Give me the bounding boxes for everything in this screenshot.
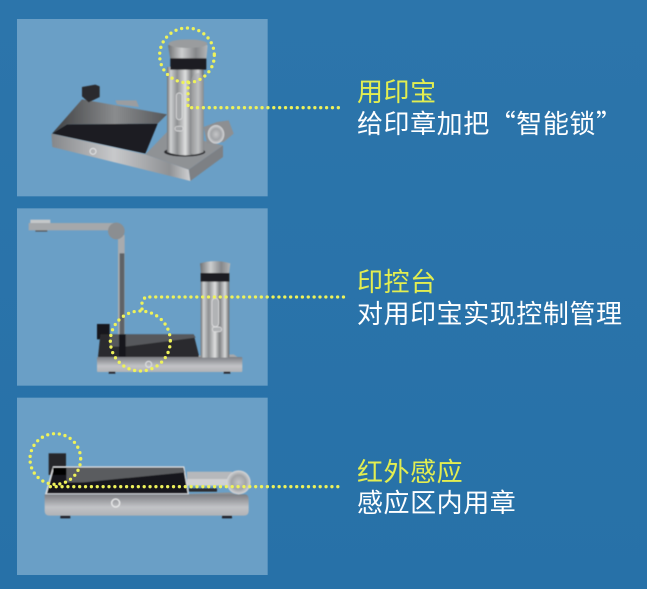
text block: infrared sensor	[357, 452, 516, 520]
text block: infrared sensor: 感应区内用章	[357, 483, 516, 520]
text block: control console: 印控台	[357, 262, 437, 299]
text block: control console: 对用印宝实现控制管理	[357, 294, 623, 331]
device: arm, console and stamp	[29, 220, 242, 374]
text block: stamp unit: 用印宝	[357, 72, 437, 109]
text block: infrared sensor: 红外感应	[357, 452, 463, 489]
panel: control console	[17, 208, 344, 386]
panel: infrared sensor	[17, 398, 344, 575]
callout ring and leader line	[30, 434, 344, 487]
device: stamp base and stamp	[51, 39, 234, 181]
text block: control console	[357, 262, 623, 331]
text block: stamp unit: 给印章加把“智能锁”	[357, 104, 623, 141]
device: side view	[45, 453, 251, 518]
callout ring and leader line	[160, 28, 344, 108]
callout ring and leader line	[110, 297, 344, 371]
panel: stamp unit	[17, 19, 344, 196]
text block: stamp unit	[357, 72, 623, 141]
